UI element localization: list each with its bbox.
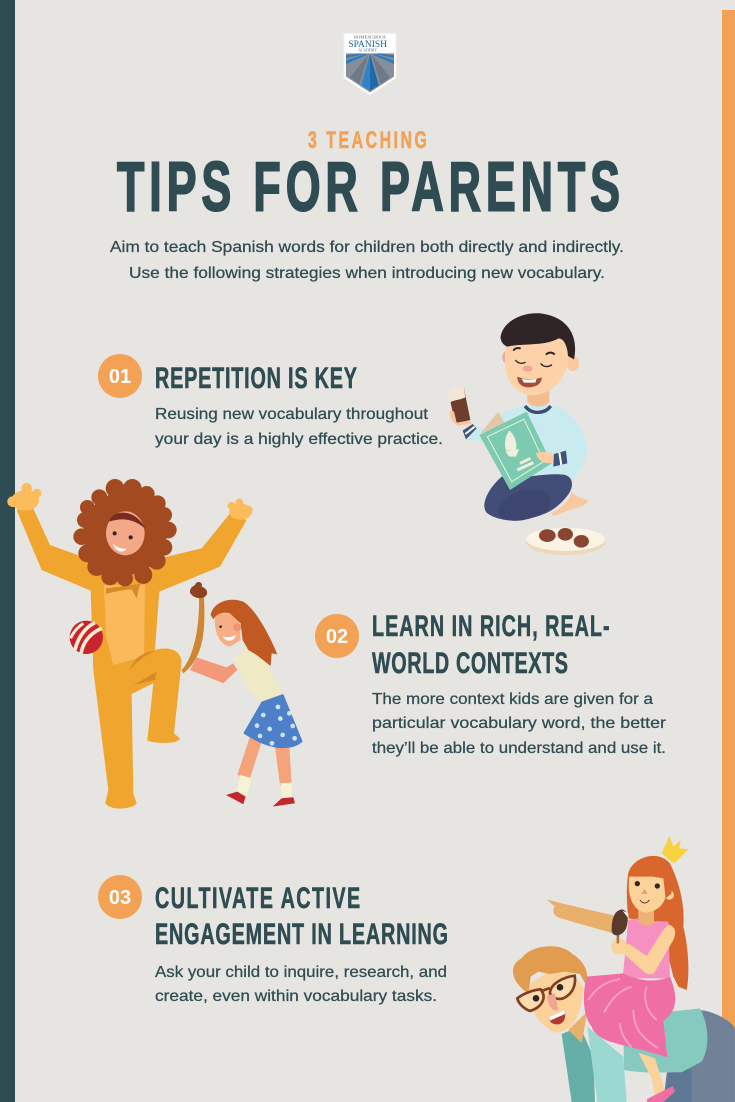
intro text: Aim to teach Spanish words for children both directly and indirectly.	[110, 239, 624, 256]
father head	[513, 946, 587, 1033]
right sidebar	[722, 10, 735, 1102]
logo: Spanish academy shield: HOMESCHOOL	[353, 34, 387, 39]
skirt	[584, 973, 675, 1057]
left sidebar	[0, 0, 15, 1102]
left paw	[7, 483, 41, 511]
illustration: boy reading a book	[448, 313, 605, 555]
body text: tip 3: create, even within vocabulary tasks.	[155, 988, 437, 1005]
girl dress top	[623, 918, 670, 978]
tail	[182, 582, 207, 673]
plate of cookies	[526, 528, 605, 555]
number badge 02	[315, 614, 359, 658]
body text: tip 1: your day is a highly effective practice.	[155, 431, 443, 448]
right paw	[228, 499, 253, 520]
crown	[662, 836, 689, 863]
body text: tip 2	[372, 691, 667, 757]
ball	[70, 621, 103, 654]
heading: learn in rich, real-world contexts	[372, 610, 610, 680]
heading: learn in rich, real-world contexts: LEARN IN RICH, REAL-	[372, 610, 610, 643]
heading: learn in rich, real-world contexts: WORLD CONTEXTS	[372, 647, 568, 680]
intro text: Use the following strategies when introducing new vocabulary.	[129, 265, 605, 282]
heading: cultivate active engagement in learning: ENGAGEMENT IN LEARNING	[155, 918, 448, 951]
lion face	[106, 511, 146, 555]
body text: tip 1	[155, 406, 443, 448]
body text: tip 3	[155, 964, 447, 1005]
head	[501, 313, 579, 395]
girl's hair back	[627, 856, 688, 990]
father body	[562, 1008, 735, 1102]
book	[479, 412, 552, 490]
number badge 01	[98, 354, 142, 398]
logo: Spanish academy shield	[344, 33, 396, 95]
arm with ice cream	[611, 909, 675, 974]
number badge 03	[98, 875, 142, 919]
lion costume body	[17, 505, 247, 809]
body text: tip 2: The more context kids are given for a	[372, 691, 653, 708]
number badge 03: 03	[109, 887, 131, 909]
girl leg and shoe	[638, 1053, 675, 1102]
logo: Spanish academy shield: SPANISH	[348, 40, 387, 50]
glass and hand	[448, 387, 473, 426]
body text: tip 3: Ask your child to inquire, research, and	[155, 964, 447, 981]
body text: tip 2: they’ll be able to understand and use it.	[372, 740, 666, 757]
heading: cultivate active engagement in learning	[155, 882, 448, 951]
pointing arm	[547, 899, 613, 933]
number badge 02: 02	[326, 626, 348, 648]
panel: tip 2	[315, 610, 667, 757]
lion mane	[73, 479, 177, 586]
illustration: man in lion costume and girl	[7, 479, 303, 809]
panel: tip 1	[98, 354, 443, 448]
title: TIPS FOR PARENTS	[117, 149, 620, 226]
girl pushing	[190, 600, 303, 807]
heading: repetition is key: REPETITION IS KEY	[155, 362, 357, 395]
body text: tip 2: particular vocabulary word, the better	[372, 715, 667, 732]
girl head and neck	[628, 857, 674, 929]
body text: tip 1: Reusing new vocabulary throughout	[155, 406, 429, 423]
number badge 01: 01	[109, 366, 131, 388]
illustration: girl riding on father's back	[513, 836, 735, 1102]
panel: tip 3	[98, 875, 448, 1005]
logo: Spanish academy shield: ACADEMY	[358, 48, 377, 52]
intro text	[110, 239, 624, 282]
subtitle: 3 teaching: 3 TEACHING	[308, 128, 427, 154]
heading: cultivate active engagement in learning: CULTIVATE ACTIVE	[155, 882, 360, 915]
